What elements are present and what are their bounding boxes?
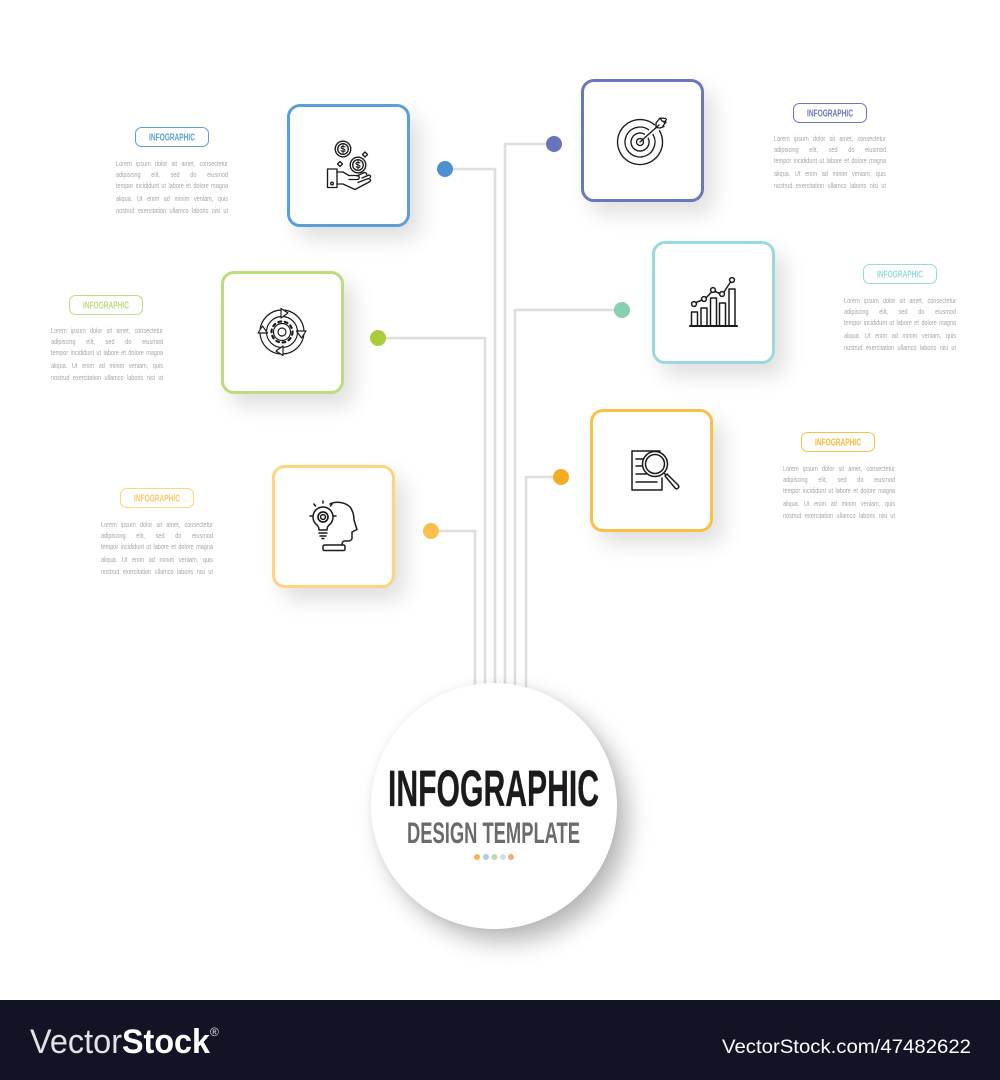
text block: yellow: adipiscing elit, sed do eiusmod bbox=[101, 531, 213, 540]
text block: indigo: nostrud exercitation ullamco laboris nisi ut bbox=[774, 181, 886, 190]
text block: orange: nostrud exercitation ullamco laboris nisi ut bbox=[783, 511, 895, 520]
connector dot: indigo bbox=[546, 136, 562, 152]
subtitle: DESIGN TEMPLATE bbox=[407, 817, 580, 850]
card: orange with document search icon bbox=[590, 409, 713, 532]
text block: blue: adipiscing elit, sed do eiusmod bbox=[116, 170, 228, 179]
text block: yellow: tempor incididunt ut labore et dolore magna bbox=[101, 542, 213, 551]
text block: orange: tempor incididunt ut labore et dolore magna bbox=[783, 486, 895, 495]
footer bar bbox=[0, 1000, 1000, 1080]
text block: mint: nostrud exercitation ullamco laboris nisi ut bbox=[844, 343, 956, 352]
footer logo: Vector bbox=[30, 1023, 122, 1061]
text block: indigo bbox=[774, 134, 886, 190]
connector dot: orange bbox=[553, 469, 569, 485]
connector dot: mint bbox=[614, 302, 630, 318]
text block: mint: Lorem ipsum dolor sit amet, consectetur bbox=[844, 296, 956, 305]
footer logo: ® bbox=[210, 1025, 219, 1039]
title: INFOGRAPHIC bbox=[388, 760, 599, 817]
connector dot: yellow bbox=[423, 523, 439, 539]
connector dot: green bbox=[370, 330, 386, 346]
footer logo bbox=[30, 1023, 219, 1061]
text block: green: aliqua. Ut enim ad minim veniam, quis bbox=[51, 361, 163, 370]
card: indigo with target icon bbox=[581, 79, 704, 202]
text block: yellow: aliqua. Ut enim ad minim veniam, quis bbox=[101, 555, 213, 564]
decorative colour dots bbox=[474, 854, 514, 860]
footer logo: Stock bbox=[122, 1023, 210, 1061]
text block: blue: tempor incididunt ut labore et dolore magna bbox=[116, 181, 228, 190]
tag: indigo bbox=[793, 103, 867, 123]
text block: mint: aliqua. Ut enim ad minim veniam, quis bbox=[844, 331, 956, 340]
tag: green bbox=[69, 295, 143, 315]
text block: mint: adipiscing elit, sed do eiusmod bbox=[844, 307, 956, 316]
card: mint with bar chart icon bbox=[652, 241, 775, 364]
tag: orange bbox=[801, 432, 875, 452]
footer url: VectorStock.com/47482622 bbox=[722, 1037, 971, 1058]
text block: mint bbox=[844, 296, 956, 352]
text block: yellow: nostrud exercitation ullamco laboris nisi ut bbox=[101, 567, 213, 576]
text block: blue: aliqua. Ut enim ad minim veniam, quis bbox=[116, 194, 228, 203]
text block: indigo: tempor incididunt ut labore et dolore magna bbox=[774, 156, 886, 165]
text block: blue: nostrud exercitation ullamco laboris nisi ut bbox=[116, 206, 228, 215]
card: yellow with head and lightbulb icon bbox=[272, 465, 395, 588]
text block: orange: adipiscing elit, sed do eiusmod bbox=[783, 475, 895, 484]
text block: blue: Lorem ipsum dolor sit amet, consectetur bbox=[116, 159, 228, 168]
text block: orange: aliqua. Ut enim ad minim veniam, quis bbox=[783, 499, 895, 508]
central circle with title bbox=[371, 683, 617, 929]
text block: green: nostrud exercitation ullamco laboris nisi ut bbox=[51, 373, 163, 382]
card: green with gear cycle icon bbox=[221, 271, 344, 394]
text block: yellow: Lorem ipsum dolor sit amet, consectetur bbox=[101, 520, 213, 529]
tag: mint bbox=[863, 264, 937, 284]
card: blue with coins in hand icon bbox=[287, 104, 410, 227]
text block: orange bbox=[783, 464, 896, 520]
text block: orange: Lorem ipsum dolor sit amet, consectetur bbox=[783, 464, 895, 473]
tag: blue bbox=[135, 127, 209, 147]
text block: green: adipiscing elit, sed do eiusmod bbox=[51, 337, 163, 346]
text block: green: tempor incididunt ut labore et dolore magna bbox=[51, 348, 163, 357]
text block: green bbox=[51, 326, 164, 382]
text block: indigo: aliqua. Ut enim ad minim veniam, quis bbox=[774, 169, 886, 178]
tag: yellow bbox=[120, 488, 194, 508]
text block: indigo: adipiscing elit, sed do eiusmod bbox=[774, 145, 886, 154]
text block: mint: tempor incididunt ut labore et dolore magna bbox=[844, 318, 956, 327]
text block: indigo: Lorem ipsum dolor sit amet, consectetur bbox=[774, 134, 886, 143]
text block: green: Lorem ipsum dolor sit amet, consectetur bbox=[51, 326, 163, 335]
text block: blue bbox=[116, 159, 228, 215]
text block: yellow bbox=[101, 520, 214, 576]
connector dot: blue bbox=[437, 161, 453, 177]
